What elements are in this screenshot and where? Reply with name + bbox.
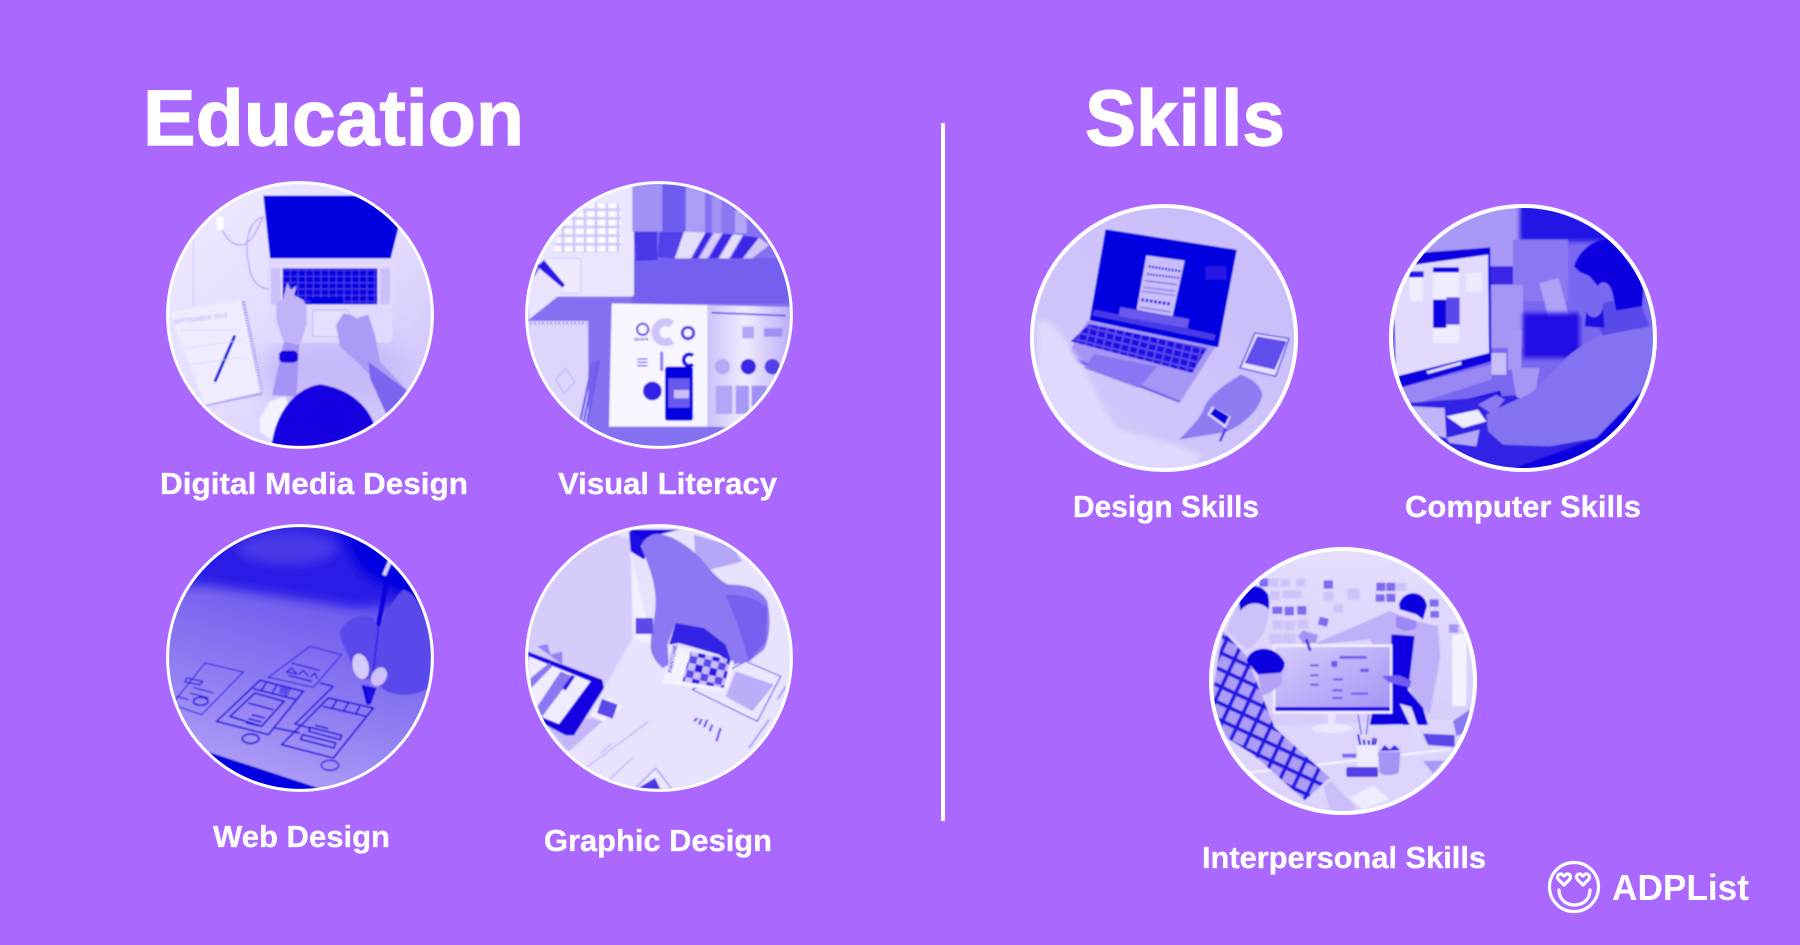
item: Visual Literacy <box>519 175 799 501</box>
photo: man at a desktop computer <box>1393 208 1653 468</box>
label: Digital Media Design <box>160 467 468 501</box>
label: Visual Literacy <box>558 467 777 501</box>
item: Digital Media Design <box>160 175 468 501</box>
ring <box>527 183 791 447</box>
heading: Skills: Skills <box>1085 73 1285 162</box>
item: Web Design <box>160 518 440 854</box>
item: Design Skills <box>1024 198 1304 524</box>
ring <box>1032 206 1296 470</box>
ring <box>527 526 791 790</box>
photo: wireframe sketching <box>169 527 431 789</box>
ring <box>1211 549 1475 813</box>
photo: laptop from above: SEPTEMBER 2019 <box>173 312 229 326</box>
panel: education <box>143 73 799 858</box>
icon: smiley with heart eyes <box>1550 862 1598 912</box>
item: Computer Skills <box>1383 198 1663 524</box>
photo: laptop with type specimen <box>1034 208 1294 468</box>
divider <box>941 123 945 821</box>
panel: skills <box>1024 73 1663 875</box>
label: Computer Skills <box>1405 490 1641 524</box>
photo: brand books on a desk <box>528 184 790 446</box>
ring <box>168 526 432 790</box>
photo: hand with colour card <box>528 527 790 789</box>
label: Design Skills <box>1073 490 1259 524</box>
item: Interpersonal Skills <box>1202 541 1486 875</box>
label: Web Design <box>213 820 390 854</box>
label: Interpersonal Skills <box>1202 841 1486 875</box>
ring <box>1391 206 1655 470</box>
photo: brand books on a desk: Quark <box>634 337 649 343</box>
photo: hand with colour card: PANTONE <box>668 644 680 673</box>
label: Graphic Design <box>544 824 772 858</box>
heading: Education: Education <box>143 73 524 162</box>
photo: laptop from above <box>169 184 431 446</box>
ring <box>168 183 432 447</box>
logo: ADPList <box>1550 862 1749 912</box>
photo: team around a monitor <box>1213 551 1473 811</box>
item: Graphic Design <box>519 518 799 858</box>
wordmark: ADPList <box>1612 867 1749 908</box>
